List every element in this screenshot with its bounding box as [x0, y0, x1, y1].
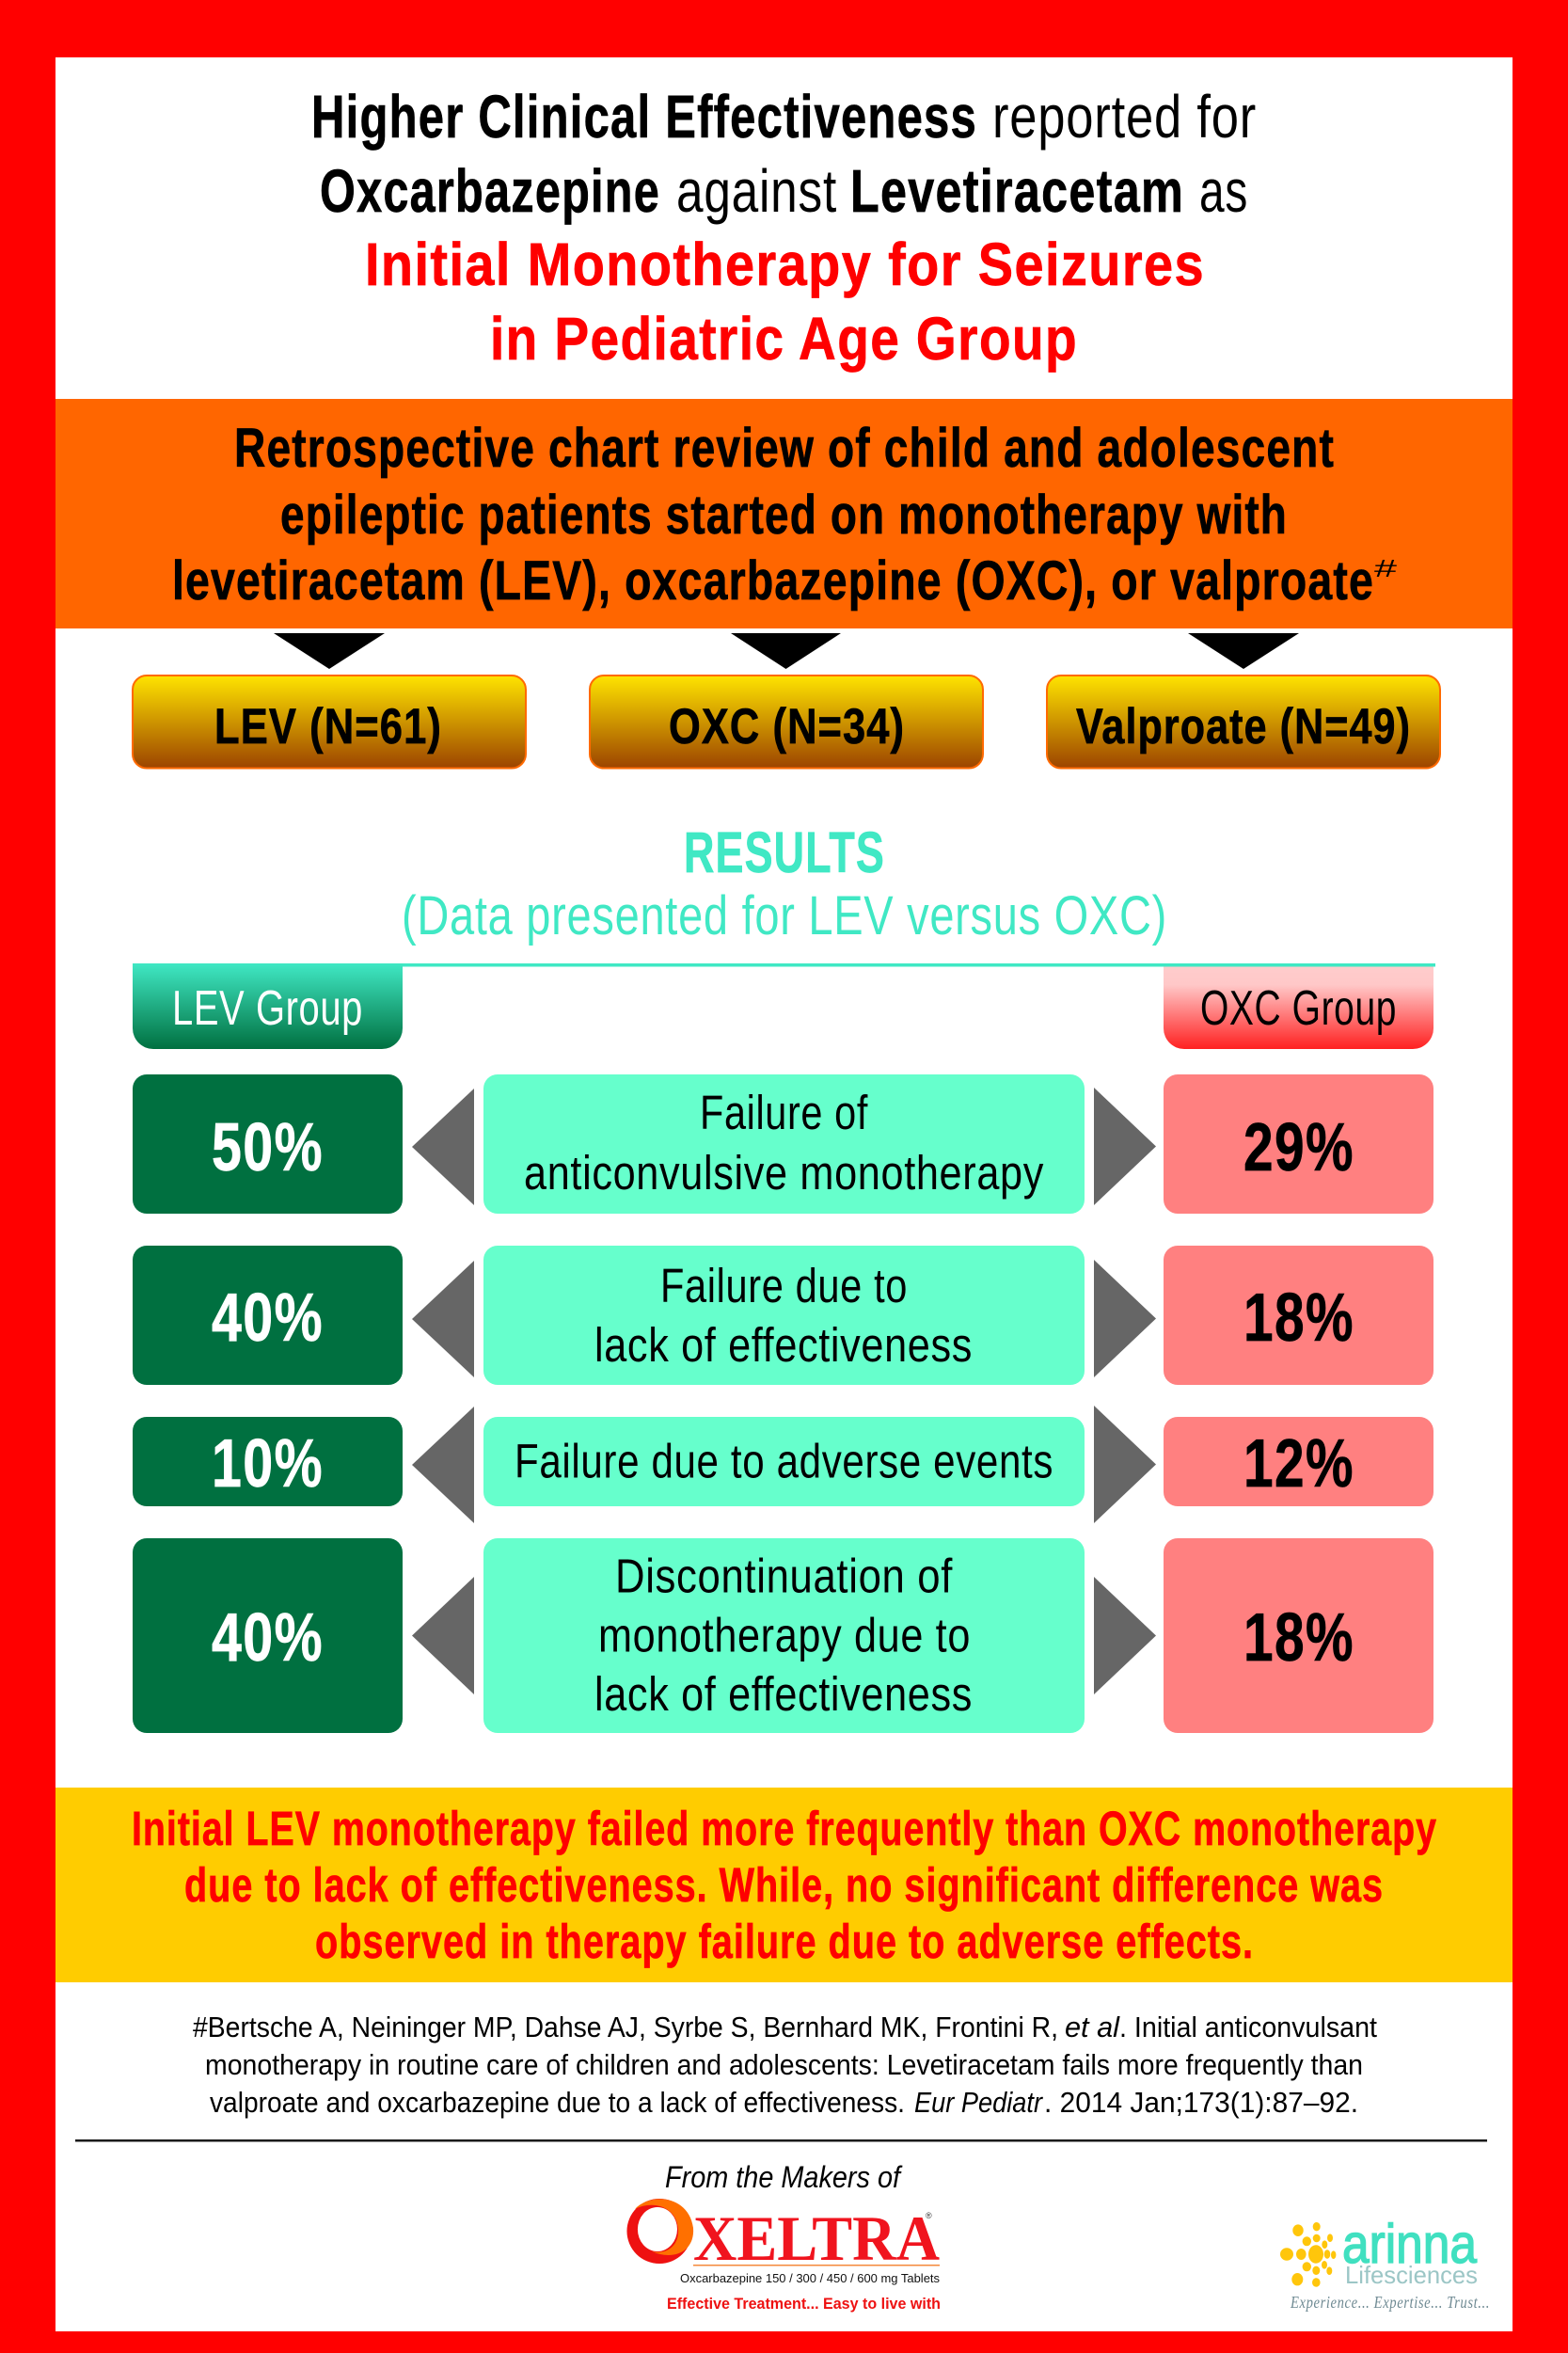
citation text: valproate and oxcarbazepine due to a lack of effectiveness. [210, 2086, 905, 2119]
citation text [193, 2011, 1377, 2119]
label: anticonvulsive monotherapy [524, 1146, 1044, 1200]
LEV value 50% [133, 1074, 403, 1214]
title: in Pediatric Age Group [490, 305, 1078, 373]
results header rule [133, 963, 1435, 967]
box: OXC N=34 [590, 676, 983, 768]
OXC value 29%: 29% [1243, 1110, 1354, 1185]
OXC value 12%: 12% [1243, 1426, 1354, 1502]
arrow: to LEV group [274, 633, 385, 669]
panel: conclusion [55, 1788, 1513, 1982]
right arrow [1094, 1088, 1156, 1205]
citation text: . Initial anticonvulsant [1119, 2011, 1377, 2043]
OXC value 18% [1164, 1246, 1433, 1385]
title: Oxcarbazepine [320, 157, 660, 225]
left arrow [412, 1407, 474, 1523]
label: monotherapy due to [598, 1609, 971, 1661]
label: Failure due to adverse events [515, 1434, 1053, 1488]
arrow: to valproate group [1188, 633, 1299, 669]
OXC value 18% [1164, 1538, 1433, 1733]
citation text: et al [1065, 2011, 1120, 2043]
tab: LEV Group [133, 963, 403, 1049]
label: lack of effectiveness [594, 1318, 973, 1372]
OXC value 18%: 18% [1243, 1600, 1354, 1676]
LEV value 40%: 40% [212, 1280, 324, 1356]
panel: study description banner [55, 399, 1513, 628]
from the makers line: From the Makers of [665, 2160, 903, 2194]
label: Failure of [700, 1086, 868, 1139]
row 1: failure of anticonvulsive monotherapy [133, 1074, 1433, 1214]
LEV value 10% [133, 1417, 403, 1506]
footer divider [75, 2139, 1487, 2141]
label: lack of effectiveness [594, 1667, 973, 1721]
wordmark: arinna [1342, 2214, 1478, 2275]
row 2: failure due to lack of effectiveness [133, 1246, 1433, 1385]
label [483, 1417, 1085, 1506]
panel: study description banner: # [1374, 554, 1398, 582]
LEV value 10%: 10% [212, 1426, 324, 1502]
left arrow [412, 1577, 474, 1694]
panel: conclusion: observed in therapy failure due to adverse effects. [315, 1915, 1254, 1968]
arrow: to OXC group [731, 633, 841, 669]
OXC value 12% [1164, 1417, 1433, 1506]
label: Failure due to [660, 1259, 908, 1312]
citation text: . 2014 Jan;173(1):87–92. [1044, 2086, 1358, 2119]
left arrow [412, 1261, 474, 1377]
LEV value 40% [133, 1246, 403, 1385]
title [311, 83, 1257, 373]
title: Levetiracetam [850, 157, 1184, 225]
results heading: RESULTS [684, 820, 885, 884]
label [483, 1538, 1085, 1733]
logo: Arinna Lifesciences: Experience... Expertise... Trust... [1290, 2293, 1490, 2312]
box: Valproate N=49 [1047, 676, 1440, 768]
title: as [1199, 157, 1248, 225]
box: LEV N=61 [133, 676, 526, 768]
panel: study description banner: epileptic patients started on monotherapy with [280, 485, 1288, 546]
box: LEV N=61: LEV (N=61) [214, 699, 442, 755]
logo: Oxeltra: Effective Treatment... Easy to live with [667, 2296, 941, 2313]
right arrow [1094, 1577, 1156, 1694]
icon: sun dots [1280, 2222, 1336, 2287]
box: Valproate N=49: Valproate (N=49) [1076, 699, 1411, 755]
results heading [402, 820, 1167, 946]
tab: OXC Group: OXC Group [1200, 981, 1397, 1036]
label [483, 1074, 1085, 1214]
logo: Oxeltra: Oxcarbazepine 150 / 300 / 450 / 600 mg Tablets [680, 2272, 940, 2285]
citation text: monotherapy in routine care of children and adolescents: Levetiracetam fails more frequently than [205, 2048, 1363, 2081]
logo: Arinna Lifesciences [1280, 2214, 1490, 2312]
tab: OXC Group [1164, 967, 1433, 1049]
citation text: #Bertsche A, Neininger MP, Dahse AJ, Syrbe S, Bernhard MK, Frontini R, [193, 2011, 1058, 2043]
icon: O ring [626, 2199, 693, 2264]
label: Discontinuation of [615, 1549, 953, 1603]
brand wordmark: XELTRA [693, 2202, 940, 2274]
logo: Arinna Lifesciences: Lifesciences [1345, 2261, 1478, 2289]
LEV value 50%: 50% [212, 1110, 324, 1185]
title: Initial Monotherapy for Seizures [365, 231, 1205, 298]
logo: Oxeltra [626, 2160, 941, 2313]
box: OXC N=34: OXC (N=34) [669, 699, 905, 755]
logo: Oxeltra: ® [926, 2211, 932, 2220]
row 4: discontinuation due to lack of effectiveness [133, 1538, 1433, 1733]
title: reported for [992, 83, 1257, 151]
tab: LEV Group: LEV Group [172, 981, 363, 1036]
OXC value 29% [1164, 1074, 1433, 1214]
row 3: failure due to adverse events [133, 1406, 1433, 1523]
LEV value 40%: 40% [212, 1600, 324, 1676]
LEV value 40% [133, 1538, 403, 1733]
right arrow [1094, 1260, 1156, 1377]
right arrow [1094, 1406, 1156, 1523]
title: Higher Clinical Effectiveness [311, 83, 977, 151]
OXC value 18%: 18% [1243, 1280, 1354, 1356]
label [483, 1246, 1085, 1385]
citation text: Eur Pediatr [914, 2086, 1043, 2119]
title: against [676, 157, 837, 225]
left arrow [412, 1089, 474, 1205]
results heading: (Data presented for LEV versus OXC) [402, 885, 1167, 946]
